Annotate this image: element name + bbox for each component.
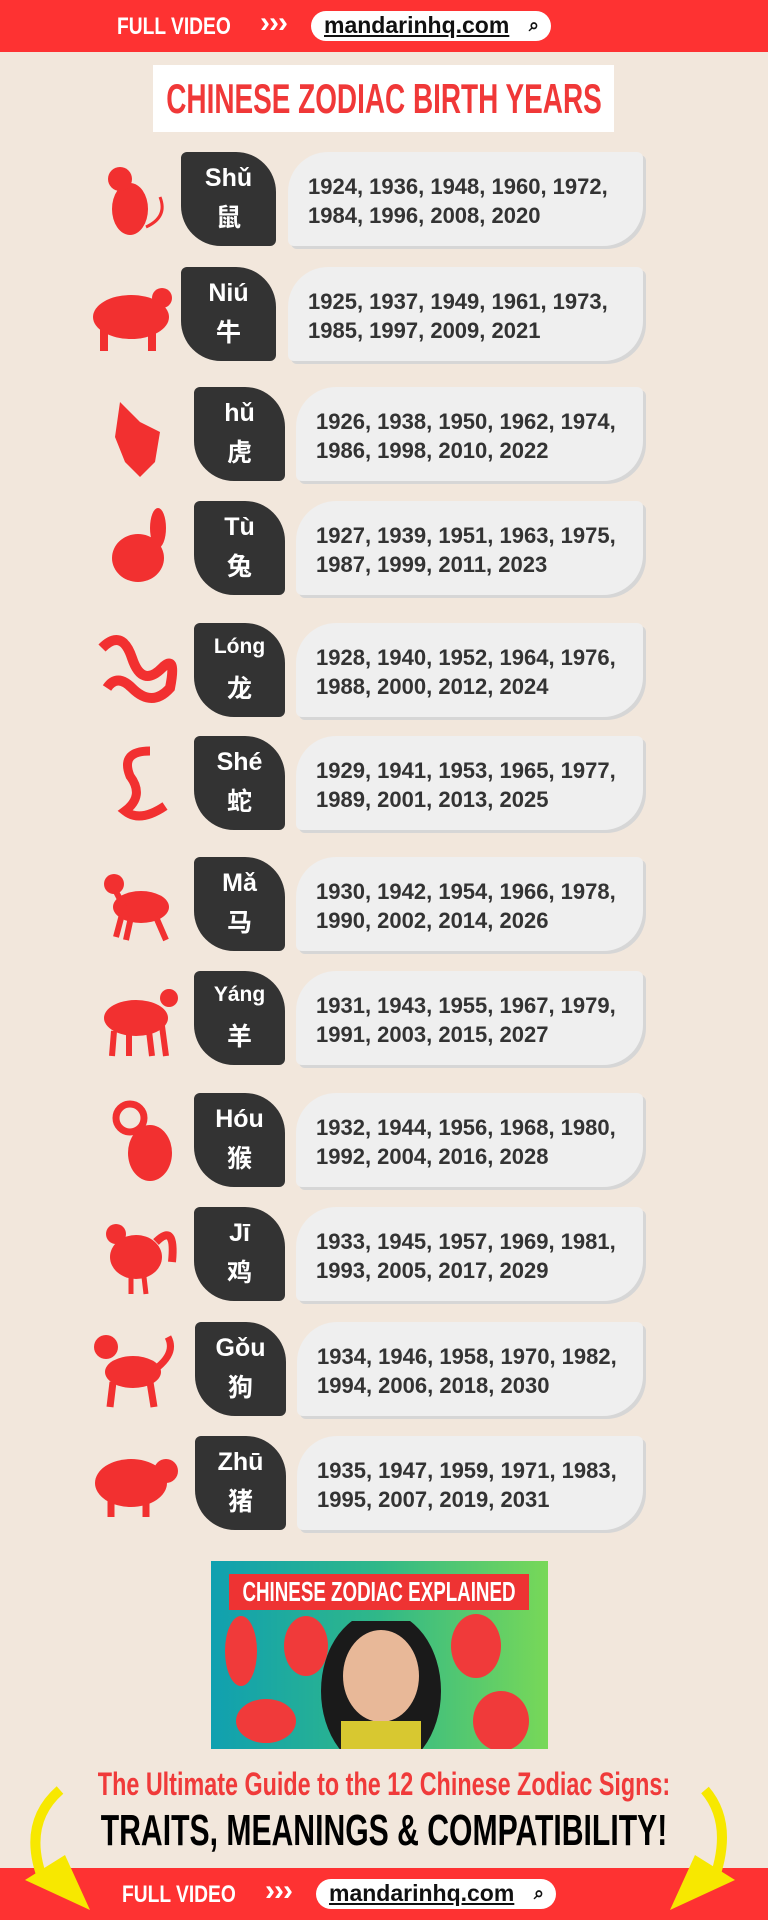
tab: Tù (224, 513, 255, 541)
row: snake (118, 736, 646, 833)
years: 1994, 2006, 2018, 2030 (317, 1373, 549, 1398)
years: 1928, 1940, 1952, 1964, 1976, (316, 645, 616, 670)
subtitle: The Ultimate Guide to the 12 Chinese Zodiac Signs: (98, 1766, 670, 1802)
years (296, 501, 643, 595)
tab (194, 736, 285, 830)
tab: Shǔ (205, 164, 252, 192)
icon: ox (93, 288, 172, 351)
years (296, 387, 643, 481)
url pill: ⌕ (534, 1883, 544, 1903)
years: 1993, 2005, 2017, 2029 (316, 1258, 548, 1283)
years: 1924, 1936, 1948, 1960, 1972, (308, 174, 608, 199)
tab: 狗 (228, 1368, 253, 1404)
years: 1933, 1945, 1957, 1969, 1981, (316, 1229, 616, 1254)
icon: rabbit (112, 508, 166, 582)
video thumbnail (211, 1561, 548, 1749)
row: dog (94, 1322, 646, 1419)
url pill: mandarinhq.com (324, 12, 509, 38)
tab: 鼠 (216, 198, 241, 234)
arrow right (670, 1786, 735, 1910)
years (297, 1436, 643, 1530)
years: 1988, 2000, 2012, 2024 (316, 674, 548, 699)
icon: rat (108, 167, 164, 235)
tab: Zhū (218, 1448, 263, 1476)
row: monkey (112, 1093, 646, 1190)
years (296, 1207, 643, 1301)
tab: 牛 (216, 313, 241, 349)
tab: Yáng (214, 983, 265, 1006)
years (288, 152, 643, 246)
tab: 马 (227, 903, 252, 939)
tab (194, 1207, 285, 1301)
banner label: FULL VIDEO (122, 1881, 236, 1908)
person (321, 1621, 441, 1749)
row: ox (93, 267, 646, 364)
row: rabbit (112, 501, 646, 598)
years: 1992, 2004, 2016, 2028 (316, 1144, 548, 1169)
row: dragon (98, 623, 646, 720)
tab (194, 501, 285, 595)
url pill: mandarinhq.com (329, 1880, 514, 1906)
banner arrows: ››› (260, 6, 287, 39)
tab: 虎 (227, 433, 252, 469)
tab: 羊 (227, 1017, 252, 1053)
years: 1932, 1944, 1956, 1968, 1980, (316, 1115, 616, 1140)
tab: Mǎ (222, 869, 257, 897)
years: 1925, 1937, 1949, 1961, 1973, (308, 289, 608, 314)
icon: snake (118, 746, 168, 820)
thumbnail animals (225, 1614, 529, 1749)
tab: hǔ (224, 399, 255, 427)
years: 1929, 1941, 1953, 1965, 1977, (316, 758, 616, 783)
row: goat (104, 971, 646, 1068)
tab: Niú (208, 279, 249, 307)
tab (194, 387, 285, 481)
tab: 龙 (227, 669, 252, 705)
years: 1926, 1938, 1950, 1962, 1974, (316, 409, 616, 434)
years: 1987, 1999, 2011, 2023 (316, 552, 547, 577)
tab: Hóu (215, 1105, 264, 1133)
tab: Lóng (214, 635, 265, 658)
icon: monkey (112, 1100, 172, 1181)
url pill (311, 11, 551, 41)
years: 1930, 1942, 1954, 1966, 1978, (316, 879, 616, 904)
icon: goat (104, 989, 178, 1056)
tab: 猴 (227, 1139, 252, 1175)
years (297, 1322, 643, 1416)
icon: pig (95, 1459, 178, 1517)
tab: Shé (217, 748, 262, 776)
tab: 蛇 (227, 782, 252, 818)
tab: 猪 (228, 1482, 253, 1518)
years: 1935, 1947, 1959, 1971, 1983, (317, 1458, 617, 1483)
top banner (0, 0, 768, 52)
banner label: FULL VIDEO (117, 13, 231, 40)
years: 1995, 2007, 2019, 2031 (317, 1487, 549, 1512)
row: rat (108, 152, 646, 249)
years (288, 267, 643, 361)
bottom banner (0, 1868, 768, 1920)
row: horse (104, 857, 646, 954)
tab (194, 857, 285, 951)
years: 1934, 1946, 1958, 1970, 1982, (317, 1344, 617, 1369)
tab (181, 267, 276, 361)
tab: Gǒu (216, 1334, 266, 1362)
arrow left (25, 1786, 90, 1910)
years (296, 1093, 643, 1187)
icon: dragon (98, 635, 178, 703)
url pill: ⌕ (529, 15, 539, 35)
icon: tiger (115, 402, 160, 477)
tab (194, 971, 285, 1065)
years (296, 857, 643, 951)
years: 1984, 1996, 2008, 2020 (308, 203, 540, 228)
banner arrows: ››› (265, 1874, 292, 1907)
tab: 兔 (227, 547, 252, 583)
years: 1991, 2003, 2015, 2027 (316, 1022, 548, 1047)
icon: horse (104, 874, 169, 942)
years: 1990, 2002, 2014, 2026 (316, 908, 548, 933)
headline: TRAITS, MEANINGS & COMPATIBILITY! (101, 1806, 667, 1855)
years: 1986, 1998, 2010, 2022 (316, 438, 548, 463)
years: 1985, 1997, 2009, 2021 (308, 318, 540, 343)
years: 1931, 1943, 1955, 1967, 1979, (316, 993, 616, 1018)
tab (195, 1436, 286, 1530)
years: 1927, 1939, 1951, 1963, 1975, (316, 523, 616, 548)
title (153, 65, 614, 132)
icon: dog (94, 1335, 174, 1408)
years: 1989, 2001, 2013, 2025 (316, 787, 548, 812)
years (296, 971, 643, 1065)
tab (181, 152, 276, 246)
years (296, 623, 643, 717)
row: pig (95, 1436, 646, 1533)
title: CHINESE ZODIAC BIRTH YEARS (166, 75, 601, 122)
row: rooster (106, 1207, 646, 1304)
tab: 鸡 (227, 1253, 252, 1289)
row: tiger (115, 387, 646, 484)
icon: rooster (106, 1224, 177, 1294)
url pill (316, 1879, 556, 1909)
years (296, 736, 643, 830)
tab: Jī (229, 1219, 250, 1247)
tab (195, 1322, 286, 1416)
tab (194, 623, 285, 717)
tab (194, 1093, 285, 1187)
thumbnail banner: CHINESE ZODIAC EXPLAINED (242, 1576, 516, 1607)
